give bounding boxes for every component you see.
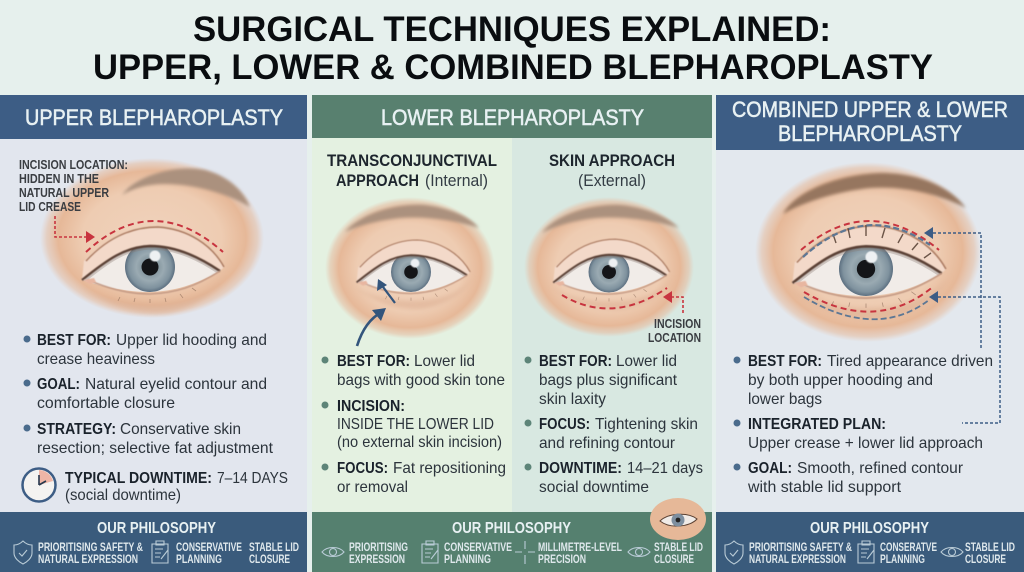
heading: lower	[312, 95, 712, 138]
list: transconjunctival details: INCISION:	[337, 398, 405, 415]
text: typical downtime	[65, 470, 288, 504]
list: transconjunctival details: BEST FOR:	[337, 353, 410, 370]
list: skin approach details: 14–21 days	[627, 460, 703, 477]
text: typical downtime: TYPICAL DOWNTIME:	[65, 470, 212, 487]
list: transconjunctival details: Lower lid	[414, 353, 475, 370]
panel: upper blepharoplasty	[0, 95, 307, 512]
illustration: skin approach eye	[524, 197, 694, 337]
heading: combined: BLEPHAROPLASTY	[778, 121, 962, 146]
heading: lower: LOWER BLEPHAROPLASTY	[381, 105, 644, 130]
list: upper details: Conservative skin	[120, 421, 241, 438]
list: upper details: STRATEGY:	[37, 421, 116, 438]
callout: incision location: LOCATION	[648, 331, 701, 345]
text: precision	[538, 542, 622, 566]
list: combined details: with stable lid support	[747, 479, 902, 496]
panel: lower blepharoplasty	[312, 95, 712, 512]
list: combined details: lower bags	[748, 391, 822, 408]
list: upper details: Natural eyelid contour and	[85, 376, 267, 393]
icon: shield	[14, 541, 32, 564]
icon: clock	[22, 468, 56, 502]
text: planning: CONSERVATIVE	[444, 542, 512, 554]
text: safety: NATURAL EXPRESSION	[749, 554, 846, 566]
text: closure	[249, 542, 299, 566]
list: skin approach details: Lower lid	[616, 353, 677, 370]
list: combined details: GOAL:	[748, 460, 792, 477]
text: closure: STABLE LID	[249, 542, 299, 554]
callout: incision location: HIDDEN IN THE	[19, 172, 99, 186]
callout: incision location: LID CREASE	[19, 200, 81, 214]
list: transconjunctival details: INSIDE THE LOWER LID	[337, 416, 494, 433]
list: upper details: BEST FOR:	[37, 332, 111, 349]
text: closure: CLOSURE	[965, 554, 1006, 566]
text: safety: PRIORITISING SAFETY &	[38, 542, 143, 554]
icon: clipboard	[858, 541, 874, 563]
list: skin approach details: Tightening skin	[595, 416, 698, 433]
heading: upper: UPPER BLEPHAROPLASTY	[25, 105, 283, 130]
list: transconjunctival details: Fat repositioning	[393, 460, 506, 477]
text: expression	[349, 542, 408, 566]
arrow: internal approach	[357, 279, 395, 346]
text: closure	[654, 542, 703, 566]
title: SURGICAL TECHNIQUES EXPLAINED:	[193, 10, 831, 49]
text: planning	[176, 542, 242, 566]
illustration: combined eye	[755, 162, 981, 342]
illustration: upper eye	[40, 158, 264, 318]
text: planning: PLANNING	[176, 554, 222, 566]
text: typical downtime: 7–14 DAYS	[217, 470, 288, 487]
callout: incision location: INCISION LOCATION:	[19, 158, 128, 172]
list: upper details: crease heaviness	[37, 351, 155, 368]
text: closure: CLOSURE	[654, 554, 694, 566]
list: combined details: INTEGRATED PLAN:	[748, 416, 886, 433]
list: transconjunctival details	[322, 353, 506, 496]
footer: upper philosophy	[0, 512, 307, 572]
text: precision: MILLIMETRE-LEVEL	[538, 542, 622, 554]
list: upper details	[24, 332, 274, 457]
text: safety	[38, 542, 143, 566]
text: safety	[749, 542, 852, 566]
list: upper details: comfortable closure	[37, 395, 175, 412]
list: combined details: by both upper hooding and	[748, 372, 933, 389]
arrow: incision pointer	[55, 216, 95, 243]
subheading: skin approach	[549, 151, 675, 190]
list: transconjunctival details: FOCUS:	[337, 460, 388, 477]
footer: combined philosophy: OUR PHILOSOPHY	[810, 520, 929, 537]
list: skin approach details: BEST FOR:	[539, 353, 612, 370]
list: skin approach details	[524, 353, 703, 496]
list: combined details: BEST FOR:	[748, 353, 822, 370]
icon: shield	[725, 541, 743, 564]
callout: incision location: NATURAL UPPER	[19, 186, 109, 200]
text: safety: PRIORITISING SAFETY &	[749, 542, 852, 554]
footer: upper philosophy: OUR PHILOSOPHY	[97, 520, 216, 537]
text: planning: CONSERATVE	[880, 542, 937, 554]
illustration: transconjunctival eye	[325, 197, 495, 339]
text: precision: PRECISION	[538, 554, 586, 566]
list: skin approach details: social downtime	[539, 479, 649, 496]
icon: eye	[322, 548, 344, 556]
text: safety: NATURAL EXPRESSION	[38, 554, 138, 566]
subheading: transconjunctival: APPROACH	[336, 171, 419, 190]
icon: eye	[628, 548, 650, 556]
list: transconjunctival details: or removal	[337, 479, 408, 496]
title	[93, 10, 933, 87]
list: transconjunctival details: bags with good skin tone	[337, 372, 505, 389]
icon: eye	[941, 548, 963, 556]
list: combined details: Tired appearance driven	[827, 353, 993, 370]
subheading: skin approach: (External)	[578, 171, 646, 190]
footer: lower philosophy: OUR PHILOSOPHY	[452, 520, 571, 537]
callout: incision location: INCISION	[654, 317, 701, 331]
arrow: skin incision pointer	[663, 291, 683, 313]
list: combined details: Upper crease + lower lid approach	[748, 435, 983, 452]
footer: combined philosophy	[716, 512, 1024, 572]
heading: upper	[0, 95, 307, 139]
text: closure: CLOSURE	[249, 554, 290, 566]
footer: lower philosophy	[312, 498, 712, 572]
text: planning	[444, 542, 512, 566]
text: expression: EXPRESSION	[349, 554, 405, 566]
text: planning: PLANNING	[444, 554, 491, 566]
icon: precision star	[515, 541, 535, 564]
list: combined details	[734, 353, 993, 496]
list: upper details: Upper lid hooding and	[116, 332, 267, 349]
subheading: transconjunctival: (Internal)	[425, 171, 488, 190]
title: UPPER, LOWER & COMBINED BLEPHAROPLASTY	[93, 48, 933, 87]
list: upper details: resection; selective fat adjustment	[37, 440, 274, 457]
subheading: transconjunctival: TRANSCONJUNCTIVAL	[327, 151, 497, 170]
list: skin approach details: and refining contour	[539, 435, 676, 452]
text: planning	[880, 542, 937, 566]
list: upper details: GOAL:	[37, 376, 80, 393]
list: skin approach details: DOWNTIME:	[539, 460, 622, 477]
illustration: small eye	[650, 498, 706, 540]
list: transconjunctival details: (no external skin incision)	[337, 434, 502, 451]
callout: incision location	[19, 158, 128, 214]
heading: combined	[716, 95, 1024, 150]
subheading: transconjunctival	[327, 151, 497, 190]
icon: clipboard	[152, 541, 168, 563]
text: planning: PLANNING	[880, 554, 925, 566]
callout: incision location	[648, 317, 701, 345]
text: closure	[965, 542, 1015, 566]
icon: clipboard	[422, 541, 438, 563]
subheading: skin approach: SKIN APPROACH	[549, 151, 675, 170]
list: combined details: Smooth, refined contour	[797, 460, 964, 477]
text: typical downtime: (social downtime)	[65, 487, 181, 504]
text: closure: STABLE LID	[654, 542, 703, 554]
arrows: combined pointers	[924, 227, 1000, 423]
text: planning: CONSERVATIVE	[176, 542, 242, 554]
text: expression: PRIORITISING	[349, 542, 408, 554]
panel: combined upper and lower	[716, 95, 1024, 512]
list: skin approach details: bags plus significant	[539, 372, 678, 389]
list: skin approach details: FOCUS:	[539, 416, 590, 433]
list: skin approach details: skin laxity	[539, 391, 606, 408]
